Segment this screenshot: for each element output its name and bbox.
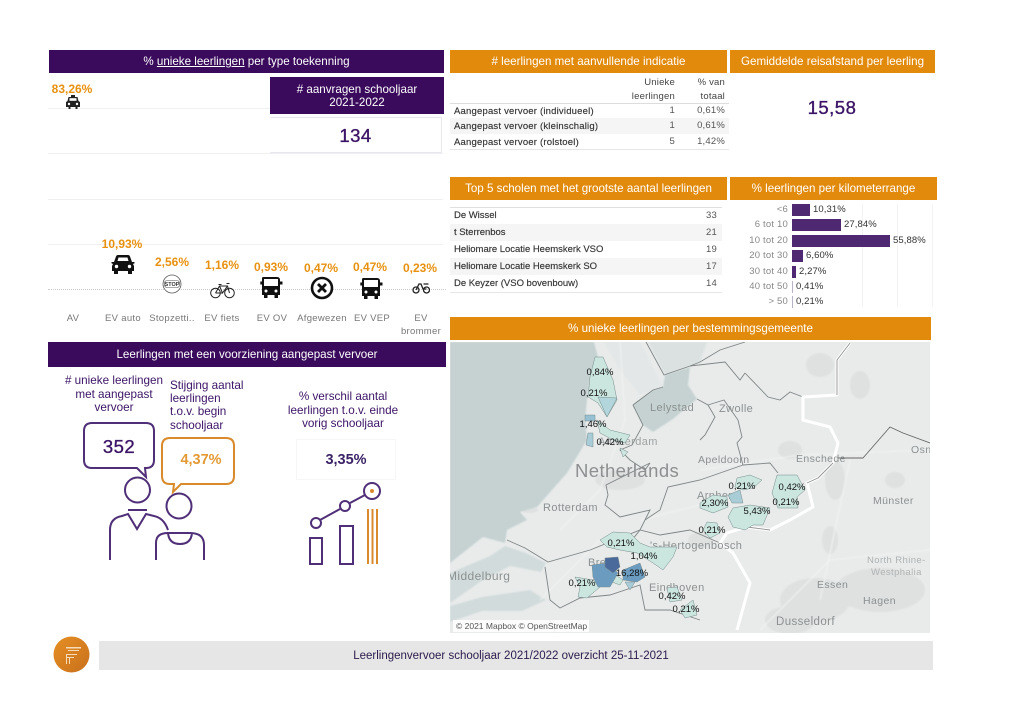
city labels: Dusseldorf (776, 616, 835, 628)
roads (540, 342, 930, 630)
value: 352: 352 (103, 436, 135, 457)
city labels: Hagen (863, 595, 896, 607)
label: EV brommer (401, 313, 441, 337)
row: Heliomare VSO: Heliomare Locatie Heemskerk VSO (454, 244, 603, 255)
heading: gemiddelde reisafstand: Gemiddelde reisafstand per leerling (741, 55, 924, 68)
text: unieke leerlingen met aangepast vervoer: met aangepast (75, 388, 153, 400)
row: Heliomare VSO (454, 244, 717, 255)
city labels: Lelystad (650, 402, 694, 414)
province borders (507, 342, 803, 632)
bars: 0,41% (796, 281, 823, 292)
row: Heliomare VSO: 19 (706, 244, 717, 255)
text: stijging aantal leerlingen: t.o.v. begin (170, 405, 226, 418)
map value labels: 0,21% (581, 388, 608, 399)
water (450, 342, 707, 622)
table header: percentage: totaal (701, 90, 725, 102)
heading: voorziening aangepast vervoer (48, 342, 446, 367)
person 2 (156, 494, 204, 560)
map value labels: 1,04% (631, 551, 658, 562)
row 2 (454, 120, 725, 132)
value: EV brommer: 0,23% (403, 261, 437, 275)
value: 15,58: 15,58 (808, 97, 856, 118)
row 2: 1 (670, 120, 675, 131)
icon: taxi (66, 95, 80, 109)
label: AV: AV (67, 313, 79, 324)
row 3: 5 (670, 136, 675, 147)
text: unieke leerlingen met aangepast vervoer: vervoer (94, 401, 133, 414)
value: EV OV: 0,93% (254, 260, 288, 274)
city labels: Westphalia (871, 567, 922, 578)
heading: aanvullende indicatie (450, 50, 727, 73)
panel: aanvragen schooljaar (270, 77, 444, 153)
icon: car (112, 255, 134, 274)
category labels: > 50 (768, 296, 788, 307)
map value labels: 2,30% (702, 498, 729, 509)
value: Stopzetting: 2,56% (155, 255, 189, 269)
row 1: Aangepast vervoer (individueel) (454, 106, 594, 117)
panel: top 5 scholen (450, 177, 727, 293)
text: verschil aantal leerlingen: vorig schooljaar (302, 417, 384, 430)
bars: 2,27% (799, 266, 826, 277)
map value labels: 0,21% (569, 578, 596, 589)
city labels: Essen (817, 579, 848, 591)
city labels: Breda (588, 557, 620, 569)
value box: 3,35% (296, 439, 396, 480)
row: Heliomare SO (454, 261, 717, 272)
heading: voorziening aangepast vervoer: Leerlingen met een voorziening aangepast vervoer (116, 348, 378, 361)
category labels: 30 tot 40 (749, 266, 788, 277)
heading: aanvullende indicatie: # leerlingen met aanvullende indicatie (491, 55, 686, 68)
logo (54, 636, 90, 672)
map value labels: 5,43% (744, 506, 771, 517)
panel: aanvullende indicatie (450, 50, 729, 150)
row: t Sterrenbos: 21 (706, 227, 717, 238)
row 2: Aangepast vervoer (kleinschalig) (454, 121, 598, 132)
footer (54, 636, 933, 672)
heading: bestemmingsgemeente: % unieke leerlingen per bestemmingsgemeente (568, 322, 813, 335)
value: Afgewezen: 0,47% (304, 261, 338, 275)
row 3: Aangepast vervoer (rolstoel) (454, 137, 579, 148)
label: EV brommer: brommer (401, 326, 441, 337)
bars: 55,88% (893, 235, 926, 246)
bar chart (749, 204, 926, 308)
category labels: 6 tot 10 (755, 219, 788, 230)
label: EV OV: EV OV (257, 313, 287, 324)
icon: stop sign (162, 274, 182, 294)
value: AV: 83,26% (52, 82, 92, 96)
heading: top 5 scholen (450, 177, 727, 200)
table header: percentage (698, 77, 725, 102)
icon: moped (412, 283, 430, 294)
text: stijging aantal leerlingen: leerlingen (170, 392, 221, 405)
category labels: 40 tot 50 (749, 281, 788, 292)
table header: percentage: % van (698, 77, 725, 88)
panel: voorziening aangepast vervoer (48, 342, 446, 565)
map value labels: 0,42% (659, 591, 686, 602)
city labels: Amsterdam (598, 436, 658, 448)
map value labels: 0,42% (597, 437, 624, 448)
map value labels: 0,21% (773, 497, 800, 508)
heading: aanvragen schooljaar: # aanvragen schooljaar (297, 82, 417, 96)
row: De Keyzer (454, 278, 717, 289)
label: EV brommer: EV (414, 313, 428, 324)
map attribution: © 2021 Mapbox © OpenStreetMap (456, 621, 587, 631)
row: De Wissel: 33 (706, 210, 717, 221)
map value labels: 1,46% (580, 419, 607, 430)
map value labels: 0,21% (729, 481, 756, 492)
heading: kilometerrange: % leerlingen per kilometerrange (752, 182, 915, 195)
heading: unieke leerlingen per type toekenning: % unieke leerlingen per type toekenning (143, 55, 350, 68)
value: 134: 134 (339, 125, 372, 146)
row: De Keyzer: De Keyzer (VSO bovenbouw) (454, 278, 578, 289)
label: Afgewezen: Afgewezen (297, 313, 347, 324)
value: 134 (270, 117, 442, 153)
city labels (447, 402, 931, 628)
text: unieke leerlingen met aangepast vervoer (65, 374, 163, 414)
map value labels: 0,21% (673, 604, 700, 615)
illustration: two people with speech bubbles (83, 422, 235, 560)
text: stijging aantal leerlingen: schooljaar (170, 419, 223, 432)
text: verschil aantal leerlingen: % verschil aantal (299, 390, 387, 403)
speech bubble: 352 (84, 423, 154, 477)
panel: kilometerrange (730, 177, 937, 308)
row: De Wissel (454, 210, 717, 221)
row 3: 1,42% (697, 136, 725, 147)
national border (720, 343, 930, 630)
city labels: Arnhem (697, 490, 738, 502)
value box: 3,35%: 3,35% (325, 452, 367, 468)
bars: 0,21% (796, 296, 823, 307)
row: De Keyzer: 14 (706, 278, 717, 289)
category labels: <6 (777, 204, 788, 215)
panel: bestemmingsgemeente (450, 317, 931, 633)
footer title bar: Leerlingenvervoer schooljaar 2021/2022 overzicht 25-11-2021 (353, 650, 669, 662)
value: EV auto: 10,93% (102, 237, 142, 251)
map value labels: 0,21% (608, 538, 635, 549)
text: stijging aantal leerlingen: Stijging aantal (170, 379, 243, 392)
city labels: Rotterdam (543, 502, 598, 514)
text: unieke leerlingen met aangepast vervoer: # unieke leerlingen (65, 374, 163, 387)
row: Heliomare SO: Heliomare Locatie Heemskerk SO (454, 261, 597, 272)
map value labels: 16,28% (616, 568, 649, 579)
city labels: Zwolle (719, 403, 753, 415)
city labels: Münster (873, 495, 914, 507)
city labels: Netherlands (575, 460, 679, 481)
footer title bar (99, 641, 933, 670)
row: t Sterrenbos (454, 227, 717, 238)
label: EV VEP: EV VEP (354, 313, 390, 324)
row 3 (454, 136, 725, 148)
label: EV fiets: EV fiets (204, 313, 240, 324)
bars: 27,84% (844, 219, 877, 230)
bars: 10,31% (813, 204, 846, 215)
icon: bicycle (210, 283, 235, 298)
label: EV auto: EV auto (105, 313, 141, 324)
speech bubble: 4,37% (162, 438, 234, 492)
row 1: 0,61% (697, 105, 725, 116)
icon: growth chart (309, 482, 381, 565)
urban patches (522, 353, 925, 634)
value: EV fiets: 1,16% (205, 258, 239, 272)
heading: gemiddelde reisafstand (730, 50, 935, 73)
text: verschil aantal leerlingen: leerlingen t.o.v. einde (288, 404, 398, 416)
city labels: Eindhoven (649, 582, 705, 594)
icon: bus OV (260, 277, 282, 298)
value: EV VEP: 0,47% (353, 260, 387, 274)
row: De Wissel: De Wissel (454, 210, 497, 221)
heading: aanvragen schooljaar: 2021-2022 (329, 96, 385, 108)
map value labels (569, 367, 806, 615)
heading: bestemmingsgemeente (450, 317, 931, 340)
map value labels: 0,21% (699, 525, 726, 536)
person 1 (110, 478, 168, 560)
label: Stopzetting: Stopzetti.. (149, 313, 195, 324)
icon: stop sign: STOP (165, 282, 180, 288)
city labels: Enschede (796, 453, 846, 465)
panel: gemiddelde reisafstand (730, 50, 935, 118)
table header (632, 77, 675, 102)
row: Heliomare SO: 17 (706, 261, 717, 272)
heading: top 5 scholen: Top 5 scholen met het grootste aantal leerlingen (465, 182, 712, 195)
text: verschil aantal leerlingen (288, 390, 398, 430)
text: stijging aantal leerlingen (170, 379, 243, 432)
row 1 (454, 105, 725, 117)
heading: kilometerrange (730, 177, 937, 200)
row 1: 1 (670, 105, 675, 116)
panel: type toekenning (48, 50, 446, 337)
heading: unieke leerlingen per type toekenning (49, 50, 444, 73)
map (450, 342, 930, 633)
map value labels: 0,42% (779, 482, 806, 493)
category labels: 20 tot 30 (749, 250, 788, 261)
bars (792, 204, 926, 308)
city labels: North Rhine- (867, 555, 926, 566)
table header: leerlingen (632, 90, 675, 102)
map value labels: 0,84% (587, 367, 614, 378)
row: t Sterrenbos: t Sterrenbos (454, 227, 506, 238)
row 2: 0,61% (697, 120, 725, 131)
choropleth municipalities (575, 357, 805, 618)
city labels: Apeldoorn (698, 454, 749, 466)
bars: 6,60% (806, 250, 833, 261)
heading: aanvragen schooljaar (270, 77, 444, 114)
city labels: 's-Hertogenbosch (650, 540, 742, 552)
category labels: 10 tot 20 (749, 235, 788, 246)
value: 4,37%: 4,37% (180, 452, 222, 468)
category labels (749, 204, 788, 307)
table header: Unieke (644, 77, 675, 88)
icon: bus VEP (360, 278, 382, 299)
icon: rejected cross (310, 276, 334, 300)
